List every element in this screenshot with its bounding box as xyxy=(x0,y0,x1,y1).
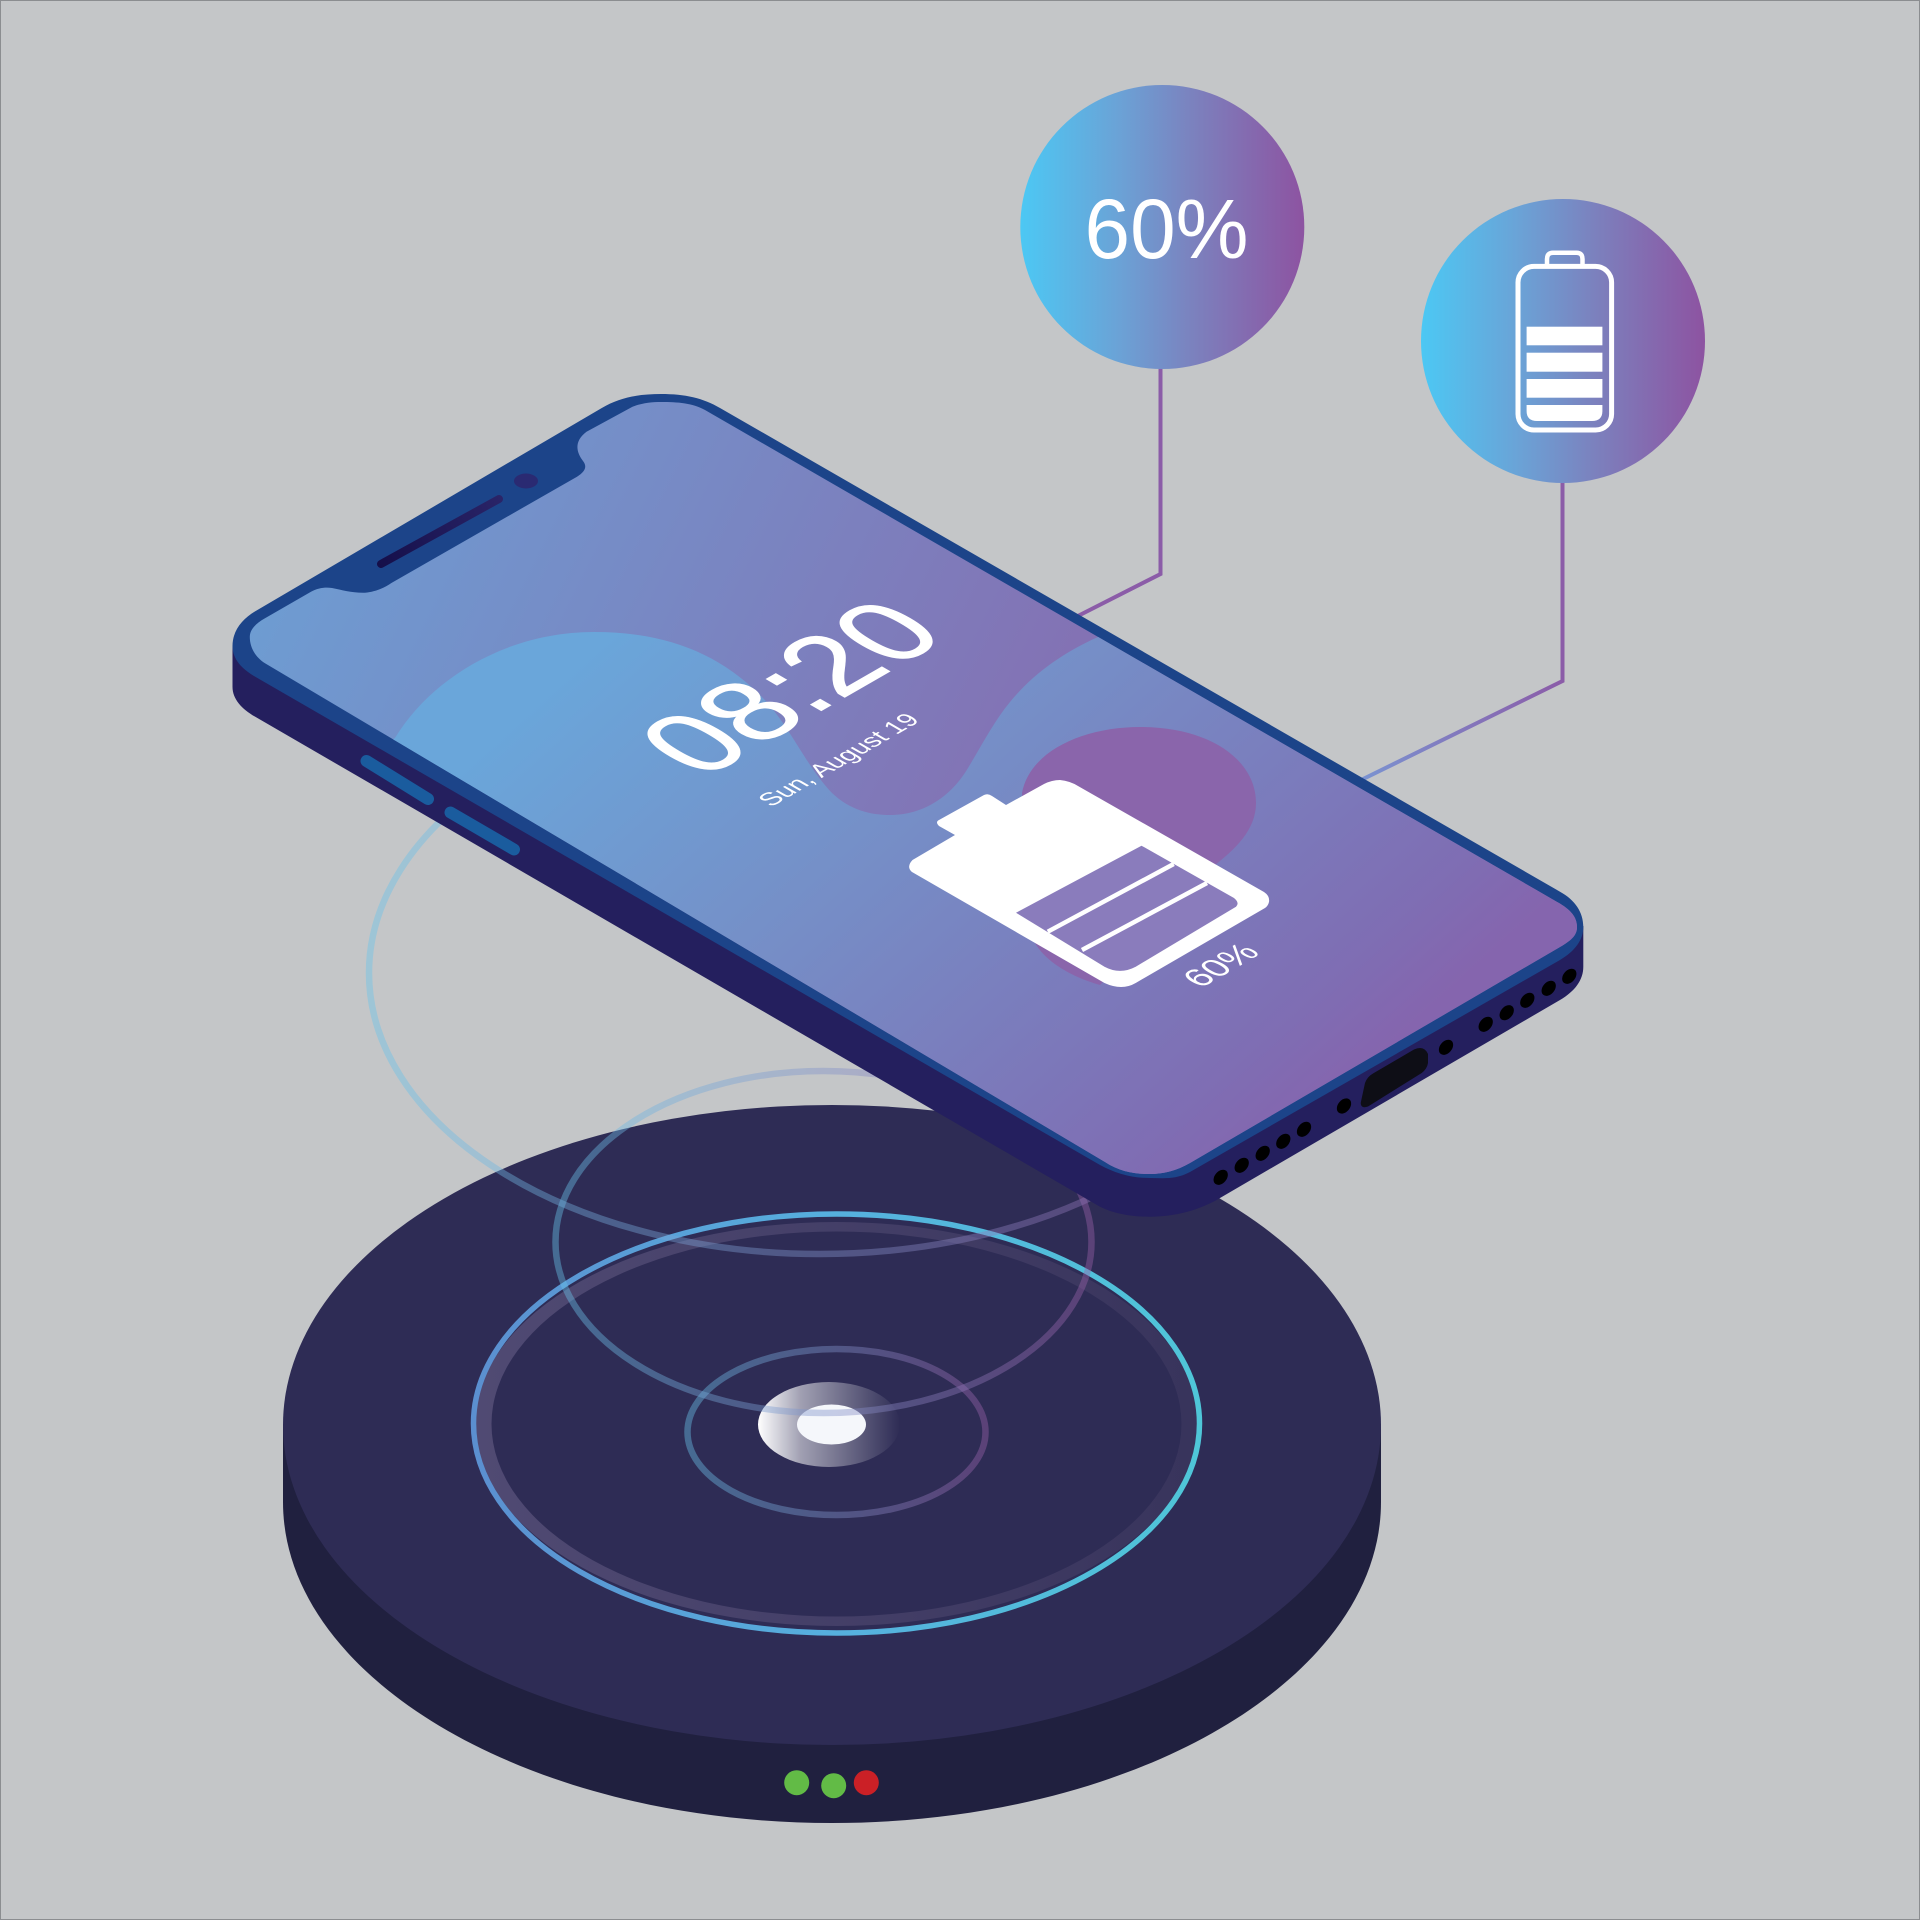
connector line to 60% bubble xyxy=(1070,365,1160,620)
connector line to battery bubble xyxy=(1355,480,1562,783)
screen purple circle xyxy=(1022,727,1256,985)
pad status lights xyxy=(784,1770,879,1798)
battery percentage: 60% xyxy=(1174,938,1268,993)
phone side wall xyxy=(232,646,1583,1217)
charging coil glow xyxy=(758,1382,900,1467)
clock date: Sun, August 19 xyxy=(752,710,926,810)
clock time: 08:20 xyxy=(608,582,972,792)
wireless charging pad xyxy=(283,1105,1381,1823)
notch camera xyxy=(514,474,538,488)
battery divider lines xyxy=(1048,864,1207,950)
outer charging ring xyxy=(474,1214,1200,1633)
phone screen xyxy=(250,402,1577,1174)
callout: 60% bubble xyxy=(1020,85,1304,369)
callout text: 60% xyxy=(1084,182,1248,276)
wireless wave: middle ring xyxy=(556,1071,1092,1413)
smartphone xyxy=(232,390,1620,1230)
charging coil center xyxy=(797,1404,866,1444)
side button lower xyxy=(450,812,514,850)
icon: isometric battery xyxy=(909,780,1269,987)
wireless wave: large ring xyxy=(369,692,1271,1254)
wireless wave: small ring xyxy=(688,1349,986,1515)
pad side wall xyxy=(283,1424,1381,1823)
phone bezel xyxy=(232,394,1583,1178)
icon: battery outline xyxy=(1518,253,1612,430)
charging port xyxy=(1361,1048,1428,1107)
battery charge window xyxy=(1016,846,1238,971)
callout: battery bubble xyxy=(1421,199,1705,483)
side button upper xyxy=(366,761,428,799)
screen wave shape xyxy=(393,632,1577,1174)
notch speaker xyxy=(381,499,499,564)
speaker holes xyxy=(1211,966,1579,1188)
pad top surface xyxy=(283,1105,1381,1745)
pad inner band xyxy=(475,1222,1198,1626)
